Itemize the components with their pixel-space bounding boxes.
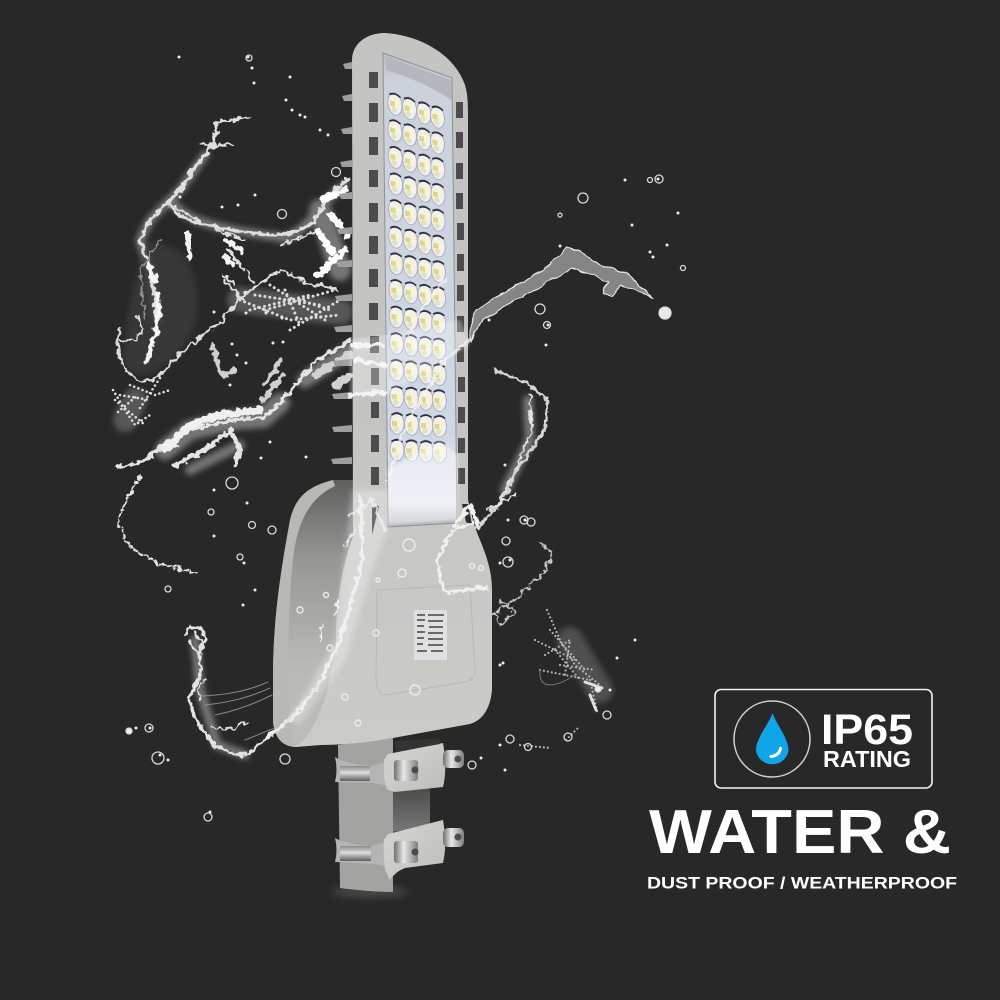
left window column (369, 72, 379, 485)
icon: water drop in circle (734, 701, 810, 777)
front nuts (394, 760, 418, 863)
rating label on body (414, 610, 447, 660)
street lamp (273, 33, 492, 897)
water flowing over the lamp (267, 280, 487, 737)
threaded bolts (340, 766, 371, 861)
water strands on panel (350, 280, 470, 480)
cooling fins (331, 62, 352, 497)
lower slit (372, 504, 472, 535)
panel plate (383, 53, 457, 527)
contact shadow (332, 887, 408, 897)
bolt sockets (412, 756, 462, 856)
splash: droplet cloud left (113, 285, 340, 425)
dark gap under housing (394, 738, 440, 752)
water sheet over arm base (290, 490, 388, 725)
splash haze layer (125, 155, 600, 755)
splash: middle band (117, 340, 352, 573)
splash: lower-left cup (118, 240, 220, 382)
water splash behind the lamp (113, 55, 686, 821)
badge text IP65: IP65 (821, 706, 913, 754)
droplets on body (297, 539, 484, 726)
badge frame (715, 690, 932, 788)
lens frame top (385, 56, 452, 100)
body lower plate shading (376, 585, 475, 695)
front body and arm (295, 33, 492, 747)
housing rim (273, 480, 335, 747)
splash: lower right cloud (520, 610, 602, 748)
headline: WATER & (649, 798, 951, 867)
droplets: bubble rings (126, 55, 686, 821)
splash: right swirl (477, 370, 547, 527)
pole clamp body (338, 738, 393, 892)
water strands on arm base (267, 497, 487, 737)
LED module panel (383, 53, 457, 527)
water sheet over arm (349, 320, 470, 395)
IP65 rating badge (715, 690, 932, 788)
splash: lower right strand (493, 542, 553, 625)
right window column (456, 102, 465, 484)
rear housing (273, 480, 380, 747)
splash: upper left arc (140, 117, 348, 335)
badge text RATING: RATING (823, 746, 911, 772)
splash: right ribbon (470, 248, 653, 342)
splash cup translucent fill (122, 240, 198, 375)
upper clamp band (384, 743, 445, 792)
left collars (335, 757, 385, 866)
lower clamp band (384, 820, 445, 880)
droplets: solid dots (136, 57, 678, 812)
rear bolts (443, 750, 464, 847)
gap between clamps (393, 786, 430, 832)
subheading: DUST PROOF / WEATHERPROOF (647, 874, 957, 892)
water sheet over panel bottom (388, 440, 458, 525)
splash: water streaks toward housing (200, 682, 276, 740)
LED rows (388, 91, 446, 463)
mounting bracket (332, 738, 464, 897)
arm windows (369, 72, 472, 535)
splash: lower left swirl (185, 627, 276, 755)
